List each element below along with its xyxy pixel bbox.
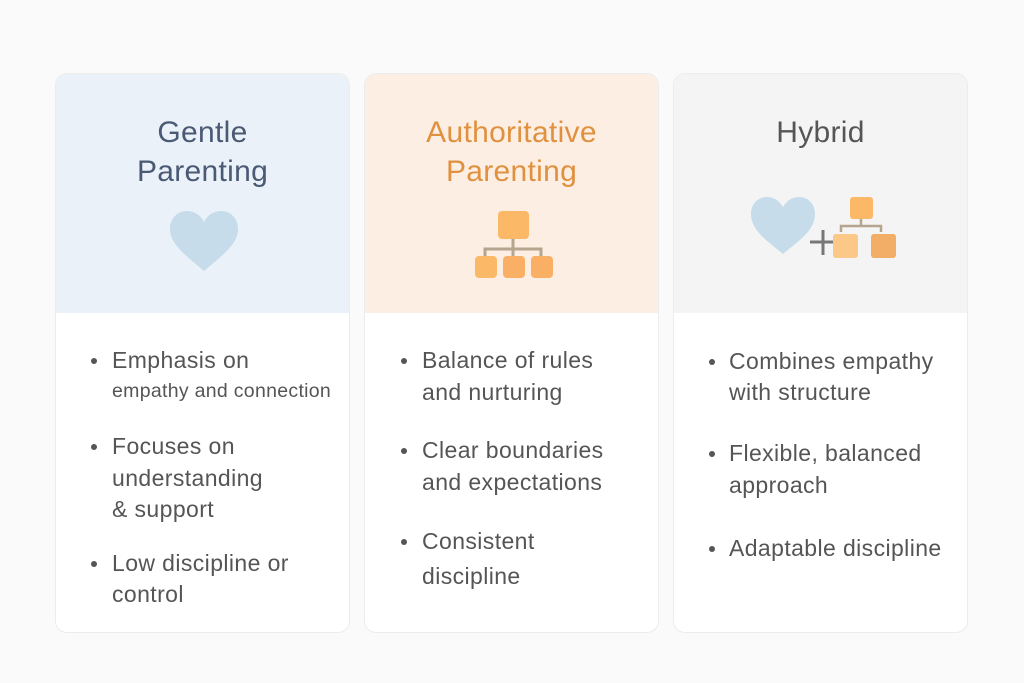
heading: gentle parenting — [137, 116, 268, 188]
bullet list: authoritative: and nurturing — [422, 379, 563, 405]
icon: org chart — [475, 211, 553, 278]
bullet list: gentle: Low discipline or — [112, 550, 289, 576]
bullet list: hybrid — [709, 348, 942, 561]
bullet list: authoritative: Balance of rules — [422, 347, 593, 373]
bullet list: authoritative: Consistent — [422, 528, 535, 554]
panel: gentle parenting — [55, 73, 350, 633]
heading: authoritative parenting: Authoritative — [426, 116, 597, 149]
bullet list: gentle: Focuses on — [112, 433, 235, 459]
bullet list: gentle: & support — [112, 496, 214, 522]
bullet list: authoritative: Clear boundaries — [422, 437, 604, 463]
bullet list: authoritative — [401, 347, 604, 589]
heading: authoritative parenting — [426, 116, 597, 188]
bullet list: gentle: empathy and connection — [112, 380, 331, 402]
heading: gentle parenting: Parenting — [137, 155, 268, 188]
panel: authoritative parenting — [364, 73, 659, 633]
bullet list: hybrid: Adaptable discipline — [729, 535, 942, 561]
header: authoritative — [365, 74, 658, 313]
bullet list: gentle: Emphasis on — [112, 347, 249, 373]
heading: authoritative parenting: Parenting — [446, 155, 577, 188]
bullet list: gentle: understanding — [112, 465, 263, 491]
icon: heart — [170, 211, 238, 271]
bullet list: gentle — [91, 347, 331, 607]
heading: hybrid: Hybrid — [776, 116, 865, 149]
bullet list: gentle: control — [112, 581, 184, 607]
bullet list: hybrid: Combines empathy — [729, 348, 934, 374]
bullet list: hybrid: approach — [729, 472, 828, 498]
heading: gentle parenting: Gentle — [157, 116, 248, 149]
bullet list: authoritative: discipline — [422, 563, 521, 589]
panel: hybrid — [673, 73, 968, 633]
header: hybrid — [674, 74, 967, 313]
bullet list: hybrid: Flexible, balanced — [729, 440, 922, 466]
header: gentle — [56, 74, 349, 313]
icon: heart plus org chart — [751, 197, 896, 258]
bullet list: authoritative: and expectations — [422, 469, 602, 495]
bullet list: hybrid: with structure — [729, 379, 871, 405]
